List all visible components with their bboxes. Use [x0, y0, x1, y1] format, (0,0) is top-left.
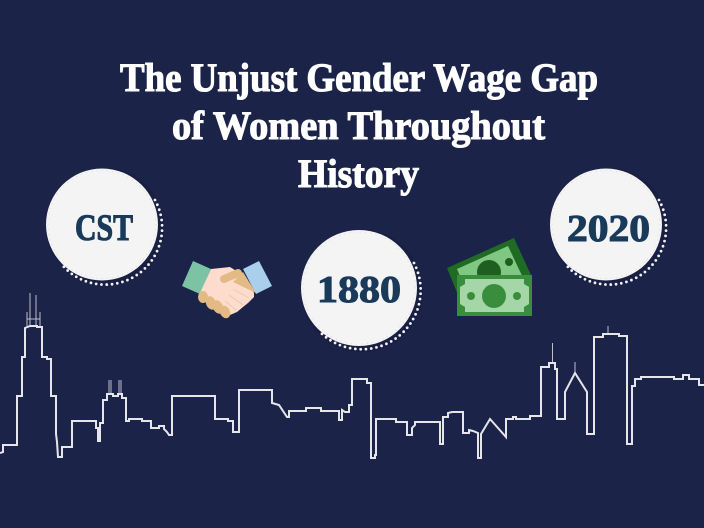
title: The Unjust Gender Wage Gap: [120, 55, 598, 100]
skyline: [0, 293, 704, 458]
badge: 2020: [550, 168, 668, 286]
badge: 1880: [301, 230, 423, 352]
badge: CST: CST: [75, 208, 133, 249]
badge: 1880: 1880: [317, 269, 401, 311]
badge: 2020: 2020: [567, 208, 650, 250]
title: of Women Throughout: [172, 103, 546, 148]
title: History: [298, 151, 419, 196]
icon: money: [447, 238, 532, 316]
badge: CST: [46, 168, 164, 286]
title: [120, 55, 598, 196]
icon: handshake: [182, 261, 272, 320]
